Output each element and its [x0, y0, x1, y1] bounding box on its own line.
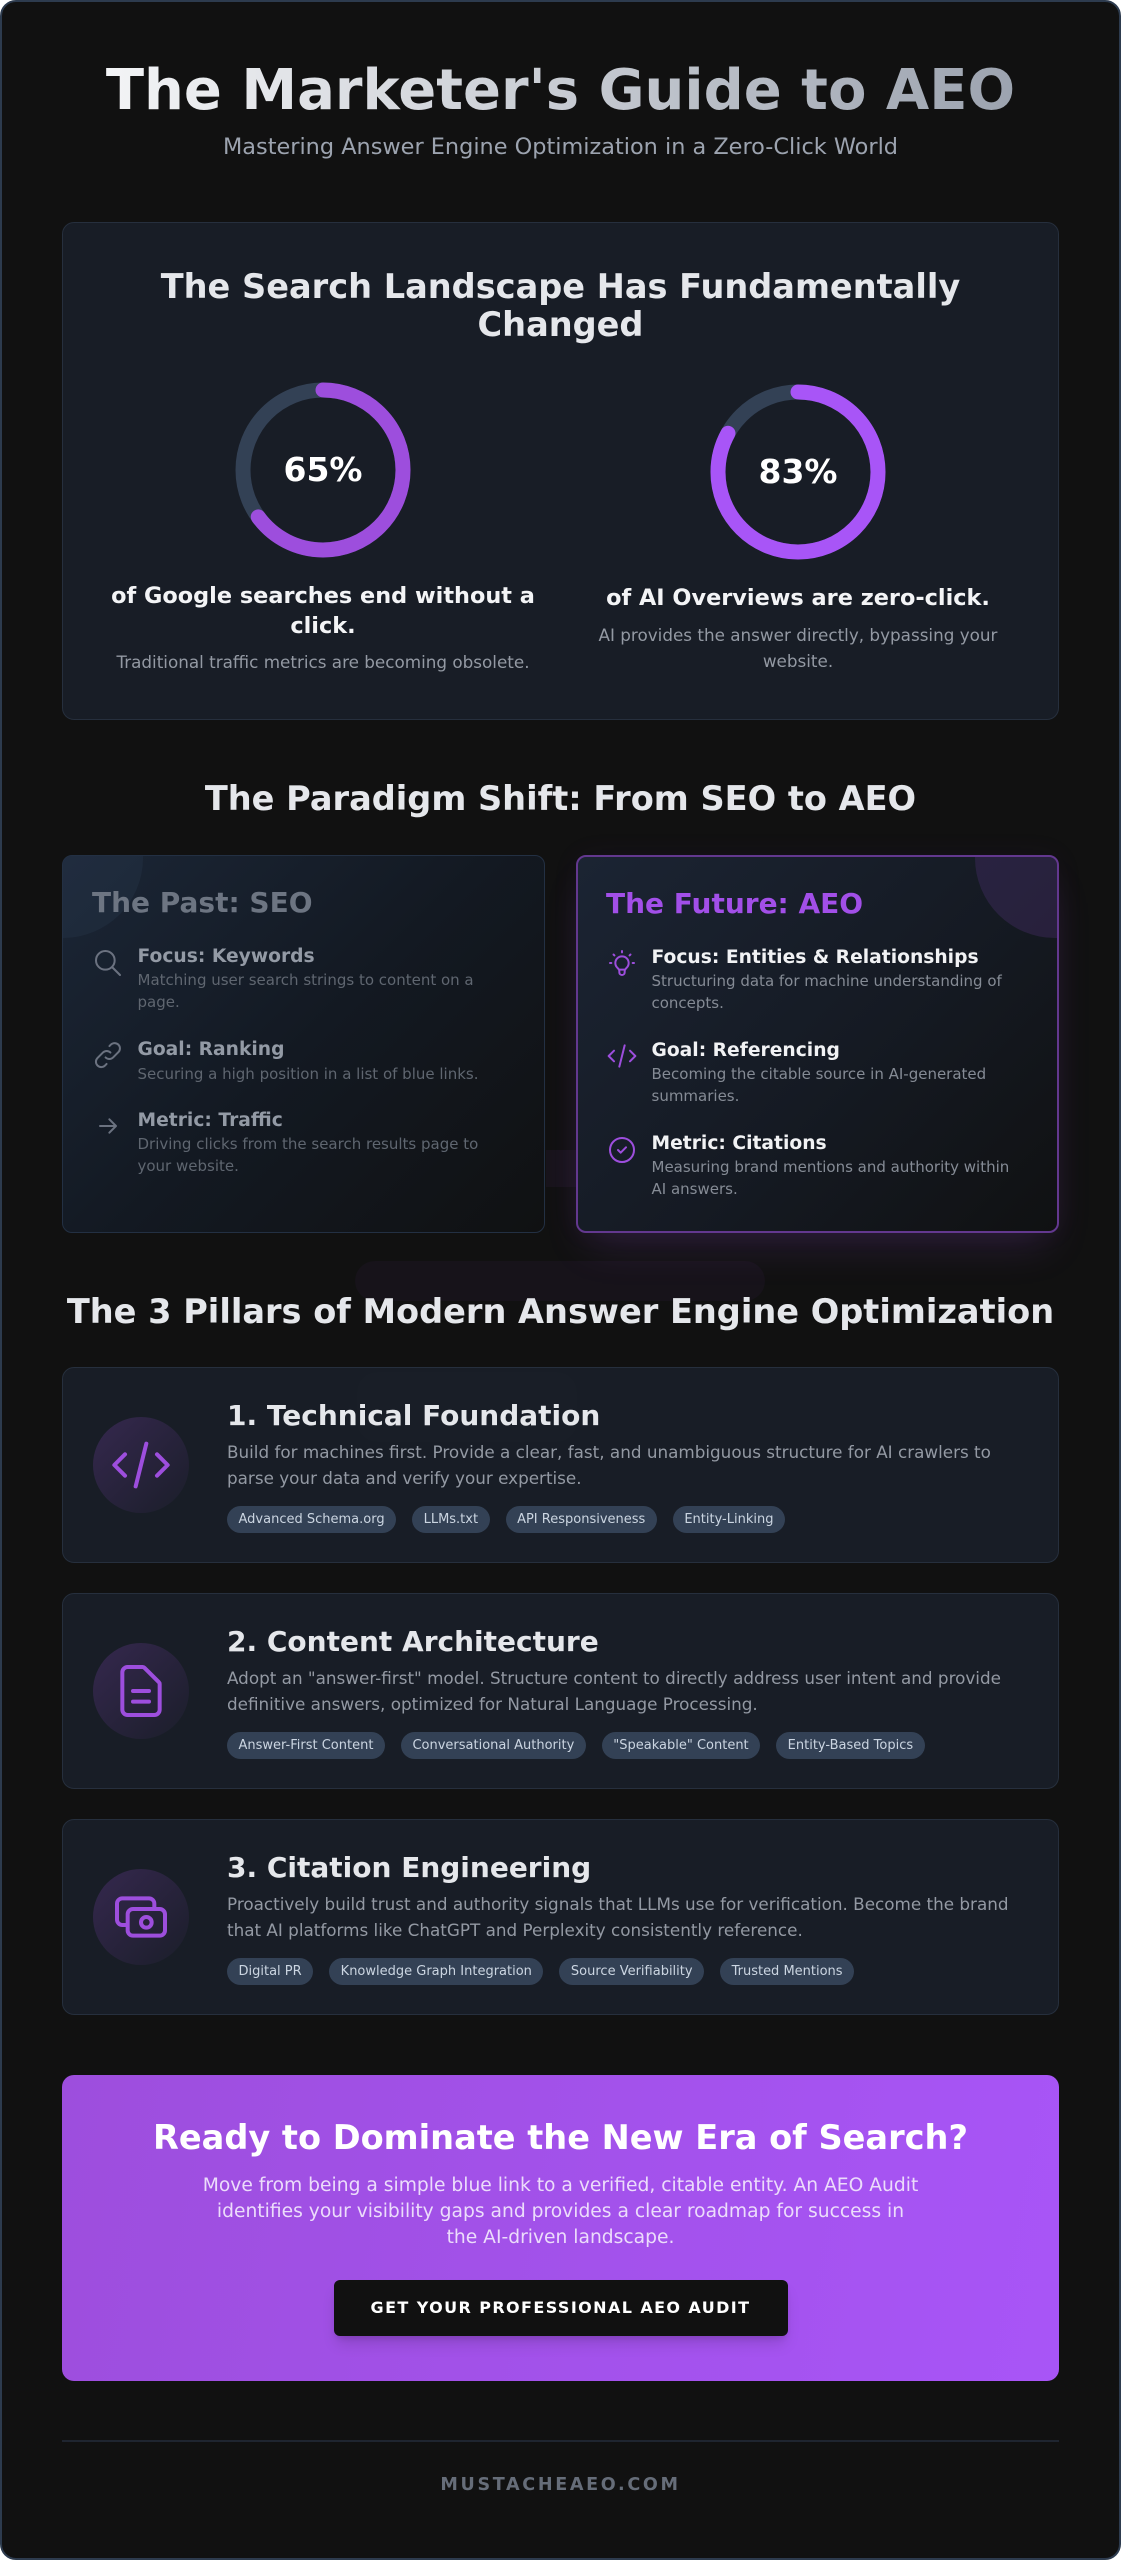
- text: metric traffic: Driving clicks from the search results page to: [138, 1135, 478, 1153]
- tags: Conversational Authority: [412, 1738, 574, 1753]
- text: goal ranking: [138, 1039, 478, 1083]
- heading: the past: The Past: SEO: [92, 886, 313, 919]
- value: 65%: 65%: [284, 450, 362, 489]
- text: metric citations: Measuring brand mentions and authority within: [652, 1158, 1009, 1176]
- text: metric citations: AI answers.: [652, 1180, 738, 1198]
- icon: link: [95, 1042, 121, 1068]
- heading: search landscape: Changed: [478, 305, 643, 344]
- icon: search: [95, 950, 121, 976]
- heading: the future: The Future: AEO: [606, 887, 863, 920]
- stat label: click.: [290, 613, 356, 639]
- cta button: [334, 2280, 788, 2336]
- stat description: [598, 625, 998, 671]
- text: metric traffic: your website.: [138, 1157, 239, 1175]
- heading: search landscape: [160, 267, 960, 344]
- cta text: Move from being a simple blue link to a verified, citable entity. An AEO Audit: [203, 2175, 918, 2196]
- heading: paradigm shift: The Paradigm Shift: From SEO to AEO: [205, 779, 916, 818]
- stat: 83 percent: [598, 384, 998, 671]
- tags: Answer-First Content: [238, 1738, 373, 1753]
- panel: citation engineering: [62, 1819, 1059, 2015]
- item: referencing: [608, 1040, 986, 1105]
- icon: lightbulb: [609, 950, 635, 976]
- text: metric citations: [652, 1133, 1009, 1198]
- cta text: [203, 2175, 918, 2248]
- tags: API Responsiveness: [517, 1512, 645, 1527]
- pillar title: 2. Content Architecture: [227, 1625, 599, 1658]
- stat label: of AI Overviews are zero-click.: [606, 585, 990, 611]
- pillar title: 3. Citation Engineering: [227, 1851, 591, 1884]
- text: focus keywords: [138, 946, 474, 1011]
- value: 83%: 83%: [758, 452, 838, 491]
- text: focus keywords: page.: [138, 993, 180, 1011]
- icon: code: [93, 1417, 189, 1513]
- tags: LLMs.txt: [424, 1512, 478, 1527]
- item: entities: [609, 947, 1002, 1012]
- pillar description: [227, 1442, 991, 1488]
- heading: search landscape: The Search Landscape Has Fundamentally: [161, 267, 960, 306]
- icon: code: [608, 1044, 636, 1068]
- item: ranking: [95, 1039, 478, 1083]
- tags: Digital PR: [238, 1964, 302, 1979]
- tags: Entity-Linking: [684, 1512, 773, 1527]
- text: focus keywords: Matching user search strings to content on a: [138, 971, 474, 989]
- panel: content architecture: [62, 1593, 1059, 1789]
- stat description: AI provides the answer directly, bypassing your: [599, 625, 997, 645]
- panel: technical foundation: [62, 1367, 1059, 1563]
- pillar description: [227, 1668, 1001, 1714]
- tags: Trusted Mentions: [732, 1964, 843, 1979]
- subtitle: Mastering Answer Engine Optimization in a Zero-Click World: [223, 134, 898, 160]
- pillar description: Proactively build trust and authority signals that LLMs use for verification. Become the brand: [227, 1894, 1009, 1914]
- tags: [227, 1958, 854, 1985]
- pillar description: parse your data and verify your expertise.: [227, 1468, 582, 1488]
- text: focus entities: [652, 947, 1002, 1012]
- item: traffic: [99, 1110, 478, 1175]
- item: citations: [609, 1133, 1009, 1198]
- item: keywords: [95, 946, 474, 1011]
- panel: search landscape: [62, 222, 1059, 720]
- cta text: the AI-driven landscape.: [447, 2227, 674, 2248]
- pillar description: definitive answers, optimized for Natural Language Processing.: [227, 1694, 758, 1714]
- donut chart: 83%: [710, 384, 886, 560]
- text: focus entities: concepts.: [652, 994, 724, 1012]
- tags: Knowledge Graph Integration: [341, 1964, 532, 1979]
- stat label: [111, 583, 535, 639]
- stat: 65 percent: [111, 382, 535, 672]
- text: goal ranking: Securing a high position in a list of blue links.: [138, 1065, 478, 1083]
- text: goal referencing: summaries.: [652, 1087, 739, 1105]
- text: focus entities: Focus: Entities & Relationships: [652, 947, 979, 968]
- title: The Marketer's Guide to AEO: [106, 58, 1015, 123]
- icon: cash: [93, 1869, 189, 1965]
- tags: Advanced Schema.org: [238, 1512, 385, 1527]
- pillar description: [227, 1894, 1009, 1940]
- text: focus keywords: Focus: Keywords: [138, 946, 315, 967]
- panel: the future AEO: [576, 855, 1059, 1233]
- tags: Entity-Based Topics: [788, 1738, 913, 1753]
- text: goal referencing: Becoming the citable source in AI-generated: [652, 1065, 986, 1083]
- text: metric traffic: [138, 1110, 478, 1175]
- tags: Source Verifiability: [571, 1964, 693, 1979]
- stat description: Traditional traffic metrics are becoming obsolete.: [116, 652, 530, 672]
- cta text: identifies your visibility gaps and provides a clear roadmap for success in: [217, 2201, 904, 2222]
- text: metric traffic: Metric: Traffic: [138, 1110, 283, 1131]
- pillar description: Adopt an "answer-first" model. Structure content to directly address user intent and provide: [227, 1668, 1001, 1688]
- pillar description: Build for machines first. Provide a clear, fast, and unambiguous structure for AI crawlers to: [227, 1442, 991, 1462]
- cta button: GET YOUR PROFESSIONAL AEO AUDIT: [371, 2298, 750, 2317]
- donut chart: 65%: [236, 382, 410, 558]
- tags: [227, 1506, 785, 1533]
- text: goal referencing: Goal: Referencing: [652, 1040, 840, 1061]
- faint glow between cards: [546, 1150, 577, 1187]
- heading: three pillars: The 3 Pillars of Modern Answer Engine Optimization: [67, 1292, 1054, 1331]
- pillar title: 1. Technical Foundation: [227, 1399, 600, 1432]
- stat description: website.: [763, 651, 833, 671]
- stat label: of Google searches end without a: [111, 583, 535, 609]
- icon: arrow right: [99, 1118, 117, 1134]
- icon: document: [93, 1643, 189, 1739]
- divider: [62, 2440, 1059, 2442]
- panel: the past SEO: [62, 855, 545, 1233]
- icon: check circle: [609, 1137, 635, 1163]
- text: metric citations: Metric: Citations: [652, 1133, 827, 1154]
- footer text: MUSTACHEAEO.COM: [440, 2475, 681, 2495]
- text: focus entities: Structuring data for machine understanding of: [652, 972, 1002, 990]
- cta heading: Ready to Dominate the New Era of Search?: [153, 2118, 968, 2157]
- tags: "Speakable" Content: [613, 1738, 749, 1753]
- panel: call to action: [62, 2075, 1059, 2381]
- text: goal referencing: [652, 1040, 986, 1105]
- text: goal ranking: Goal: Ranking: [138, 1039, 284, 1060]
- pillar description: that AI platforms like ChatGPT and Perplexity consistently reference.: [227, 1920, 803, 1940]
- tags: [227, 1732, 925, 1759]
- faint glow bar: [355, 1261, 765, 1301]
